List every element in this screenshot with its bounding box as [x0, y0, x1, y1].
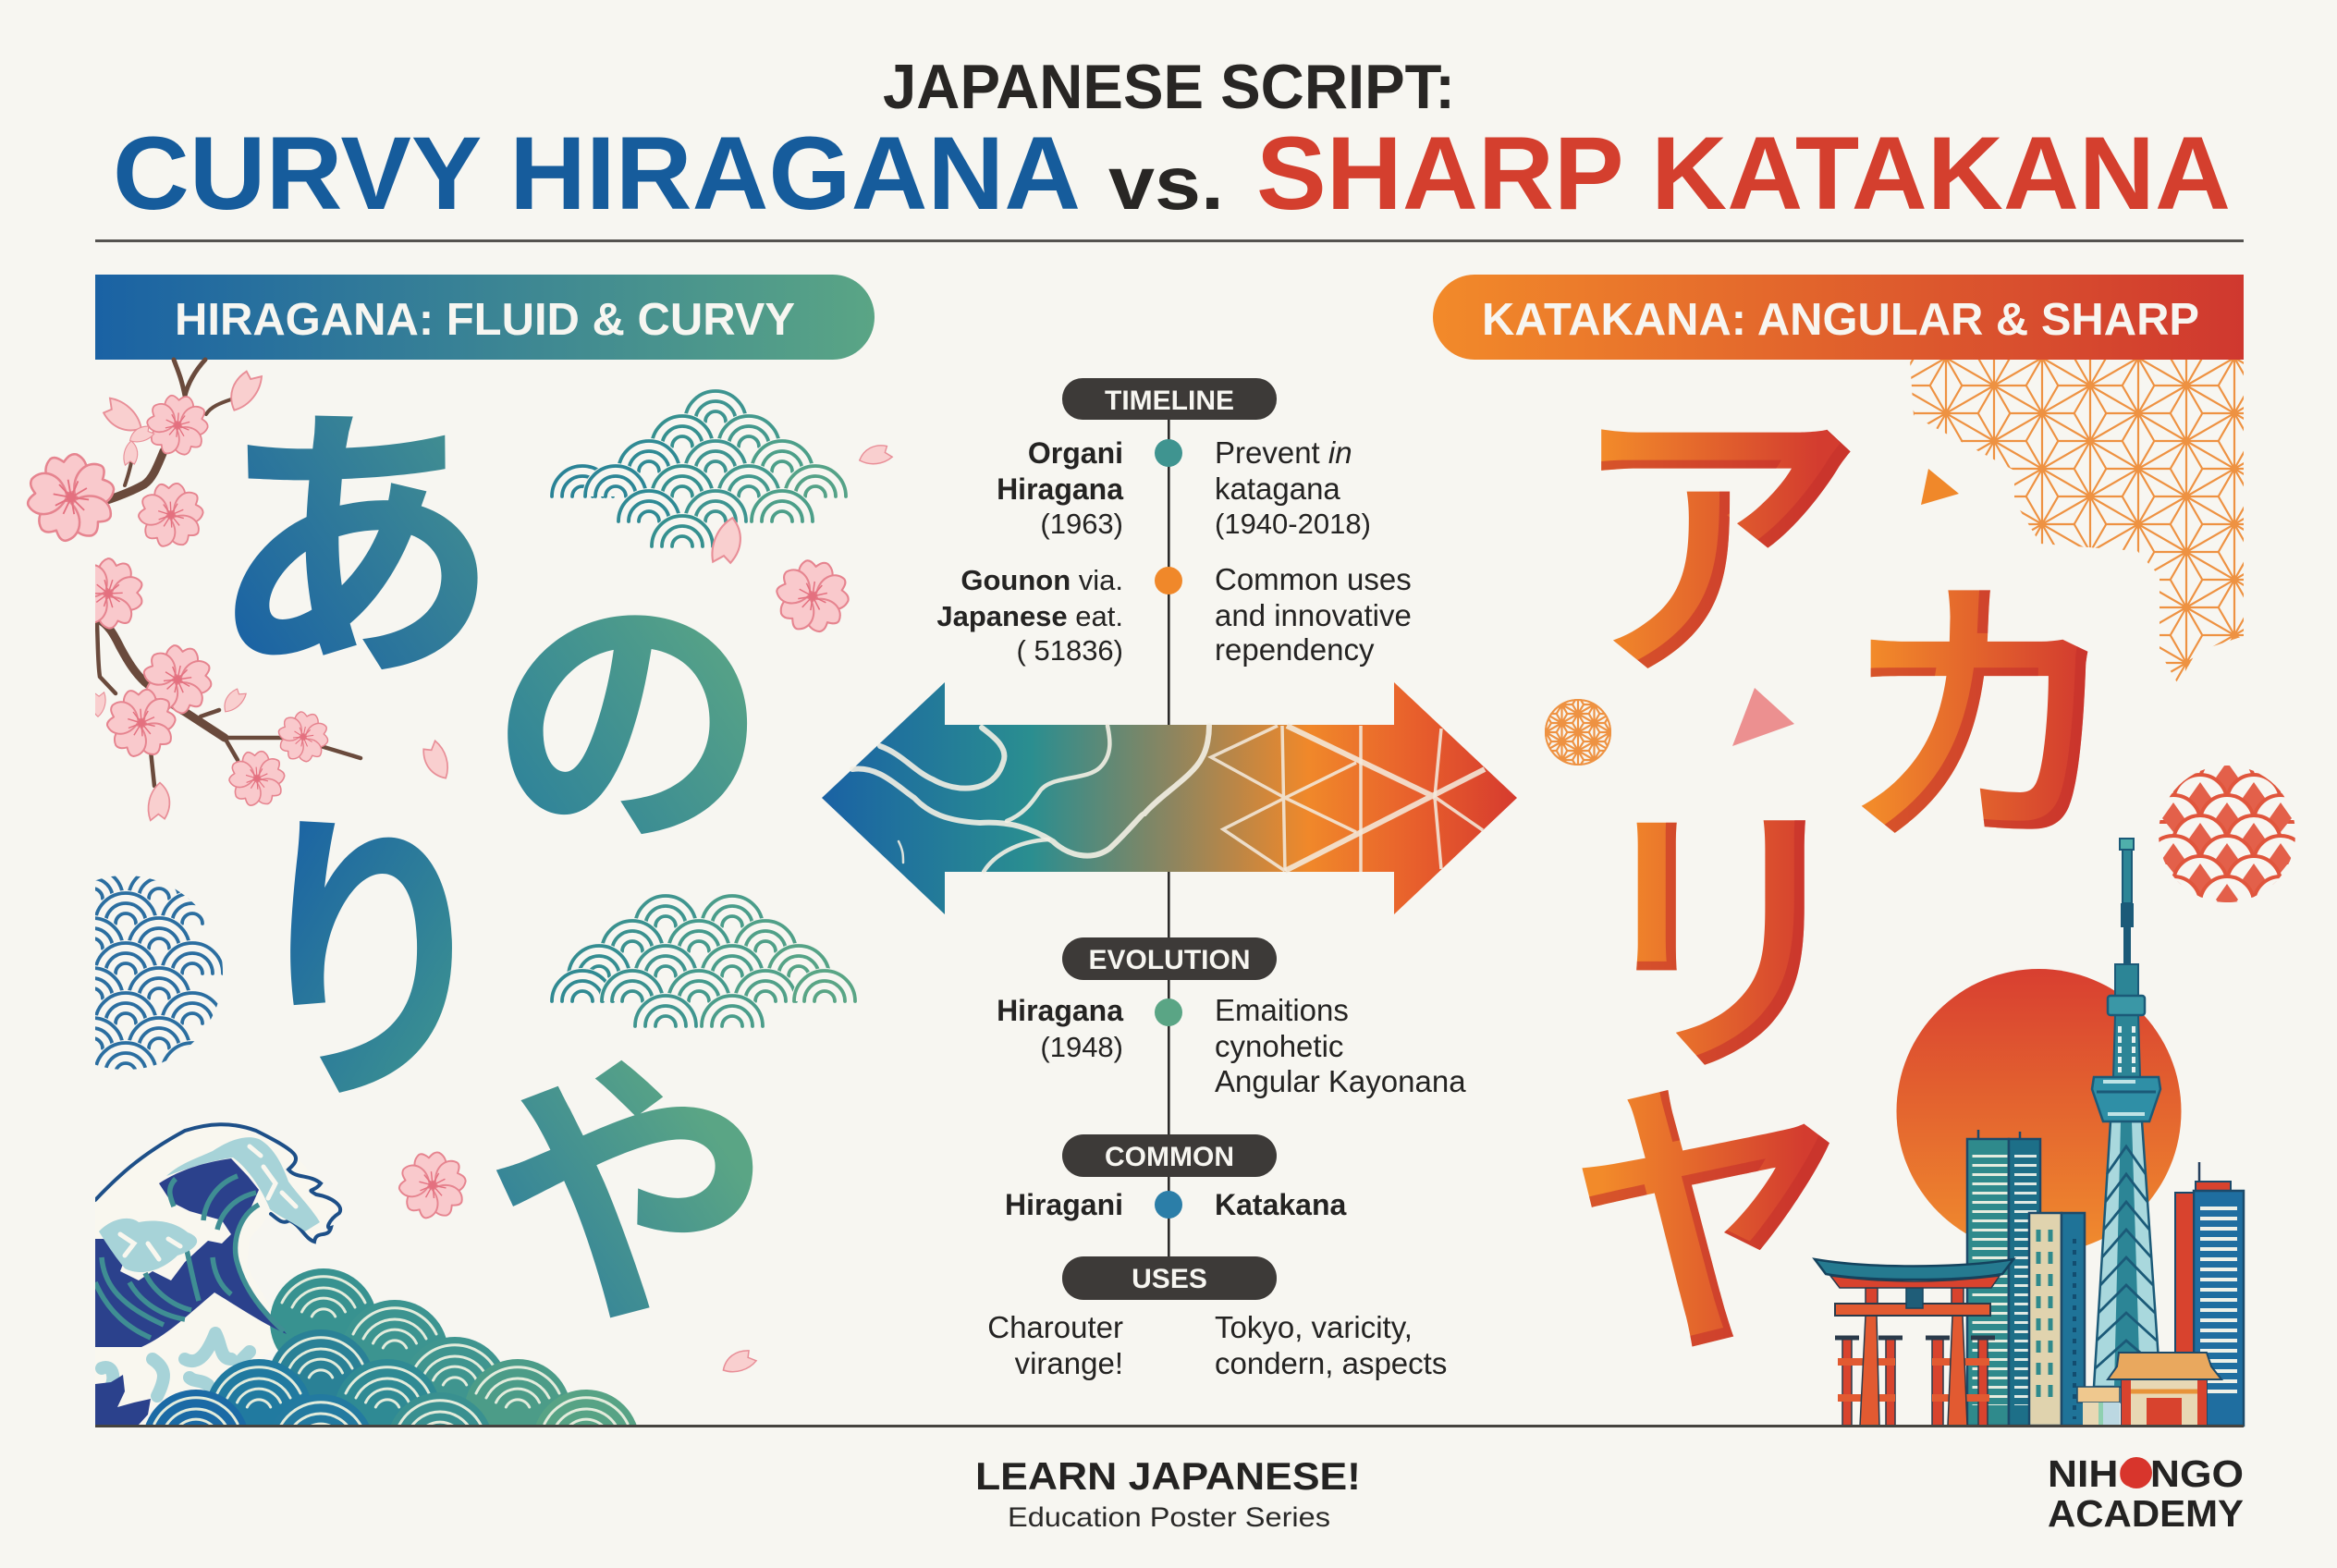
- banner: hiragana: [95, 275, 875, 360]
- cherry blossom branch: upper: [18, 360, 263, 551]
- wave pattern cluster: upper: [549, 388, 849, 546]
- illustration: rising sun: [1897, 969, 2182, 1254]
- entry: tokyo: condern, aspects: [1215, 1346, 1447, 1380]
- entry: hiragana year: (1948): [1040, 1031, 1123, 1063]
- entry: charouter: [987, 1310, 1123, 1380]
- illustration: tokyo skyline: [1815, 839, 2244, 1426]
- title: vs.: vs.: [1108, 141, 1224, 226]
- icon: orange patterned circle: [1545, 699, 1611, 766]
- building: teal tower: [1967, 1130, 2040, 1426]
- footer: call to action: [975, 1454, 1361, 1533]
- footer rule: [95, 1425, 2244, 1427]
- entry: emaitions: Angular Kayonana: [1215, 1064, 1466, 1098]
- timeline pill: timeline: TIMELINE: [1105, 386, 1234, 416]
- timeline pill: evolution: [1062, 937, 1277, 980]
- entry: tokyo: [1215, 1310, 1447, 1380]
- icon: floating blossom beside や: [394, 1149, 471, 1224]
- entry: common uses: and innovative: [1215, 598, 1412, 632]
- entry: prevent in katagana: katagana: [1215, 472, 1340, 506]
- timeline pill: uses: USES: [1132, 1264, 1207, 1294]
- entry: gounon via: Japanese eat.: [936, 600, 1123, 632]
- timeline pill: timeline: [1062, 378, 1277, 420]
- cherry blossom branch: lower: [95, 557, 362, 822]
- timeline node: blue: [1155, 1191, 1182, 1219]
- title: [113, 52, 2231, 231]
- title: Curvy Hiragana: CURVY HIRAGANA: [113, 116, 1081, 231]
- kana: や: や: [485, 967, 772, 1382]
- banner: katakana: [1433, 275, 2244, 360]
- timeline pill: common: COMMON: [1105, 1142, 1234, 1172]
- wave: lower foam: [102, 1333, 250, 1396]
- entry: prevent in katagana: Prevent in: [1215, 435, 1352, 470]
- timeline pill: evolution: EVOLUTION: [1088, 945, 1251, 975]
- logo: Nihongo Academy: NIHONGO: [2048, 1452, 2244, 1495]
- icon: petal mid: [419, 740, 456, 783]
- entry: emaitions: [1215, 993, 1466, 1098]
- wave: foam highlights: [120, 1234, 180, 1259]
- entry: emaitions: cynohetic: [1215, 1029, 1343, 1063]
- wave: foam body: [95, 1124, 339, 1425]
- entry: prevent in katagana: [1215, 435, 1371, 540]
- timeline pill: common: [1062, 1134, 1277, 1177]
- entry: common uses: Common uses: [1215, 562, 1412, 596]
- entry: charouter: Charouter: [987, 1310, 1123, 1344]
- entry: origin hiragana: [997, 436, 1123, 540]
- timeline pill: uses: [1062, 1256, 1277, 1300]
- banner: hiragana: HIRAGANA: FLUID & CURVY: [175, 295, 795, 345]
- entry: hiragana year: [997, 994, 1123, 1063]
- icon: pink triangle: [1732, 688, 1794, 746]
- entry: origin hiragana: Organi: [1028, 436, 1123, 470]
- entry: hiragana year: Hiragana: [997, 994, 1123, 1027]
- panel: hiragana side: [18, 275, 893, 1501]
- wave pattern circle: [95, 876, 223, 1070]
- landmark: sky tower: [2092, 839, 2160, 1387]
- banner: katakana: KATAKANA: ANGULAR & SHARP: [1482, 295, 2199, 345]
- timeline node: teal: [1155, 439, 1182, 467]
- icon: petal top: [857, 442, 893, 470]
- kana: ア: ア: [1568, 310, 1864, 738]
- icon: red scale circle: [2147, 754, 2307, 913]
- footer: call to action: LEARN JAPANESE!: [975, 1454, 1361, 1498]
- title: Sharp Katakana: SHARP KATAKANA: [1256, 116, 2231, 231]
- timeline node: orange: [1155, 567, 1182, 594]
- entry: hiragani: Hiragani: [1005, 1188, 1123, 1221]
- landmark: shrine gate building: [2077, 1353, 2221, 1426]
- icon: petal bottom: [719, 1346, 757, 1379]
- entry: prevent in katagana: (1940-2018): [1215, 508, 1371, 540]
- geometric pattern: asanoha corner: [1904, 360, 2244, 684]
- panel: central timeline: [822, 378, 1517, 1380]
- entry: emaitions: Emaitions: [1215, 993, 1349, 1027]
- entry: tokyo: Tokyo, varicity,: [1215, 1310, 1413, 1344]
- wave: navy base: [95, 1375, 151, 1425]
- logo: Nihongo Academy: [2048, 1452, 2244, 1535]
- timeline spine: [1168, 398, 1170, 1276]
- entry: origin hiragana: (1963): [1040, 508, 1123, 540]
- icon: floating blossom right of あ: [769, 557, 855, 640]
- kana: ヤ: ヤ: [1569, 989, 1846, 1412]
- wave: navy body: [95, 1158, 287, 1347]
- kana: り: り: [242, 712, 499, 1162]
- kana: の: の: [490, 500, 767, 901]
- wave scales behind crest: [270, 1268, 448, 1407]
- wave: teal stripes: [95, 1176, 284, 1338]
- building: blue tower: [2175, 1162, 2244, 1426]
- entry: common uses: rependency: [1215, 632, 1375, 667]
- panel: katakana side: [1433, 275, 2307, 1426]
- kana: カ: カ: [1838, 488, 2124, 903]
- entry: gounon via: ( 51836): [1017, 634, 1123, 667]
- footer: call to action: Education Poster Series: [1008, 1502, 1330, 1533]
- wave: foam patch: [99, 1219, 197, 1272]
- double arrow: [822, 682, 1517, 914]
- icon: petal over pattern: [710, 516, 744, 566]
- building: beige tower: [2029, 1213, 2085, 1426]
- logo: Nihongo Academy: ACADEMY: [2048, 1492, 2244, 1535]
- wave: crest outline: [95, 1124, 340, 1242]
- wave: foam specks: [250, 1146, 296, 1207]
- entry: charouter: virange!: [1015, 1346, 1123, 1380]
- entry: origin hiragana: Hiragana: [997, 472, 1123, 506]
- wave: light foam upper: [166, 1137, 320, 1231]
- wave scales at base: [142, 1329, 640, 1501]
- entry: katakana: Katakana: [1215, 1188, 1346, 1221]
- entry: gounon via: [936, 564, 1123, 667]
- illustration: great wave: [95, 1122, 636, 1425]
- wave pattern cluster: lower: [549, 893, 858, 1026]
- timeline node: green: [1155, 998, 1182, 1026]
- kana: あ: あ: [209, 313, 499, 735]
- landmark: torii gate: [1815, 1259, 2013, 1426]
- entry: common uses: [1215, 562, 1412, 667]
- kana: リ: リ: [1583, 708, 1860, 1134]
- title line: Japanese Script: JAPANESE SCRIPT:: [883, 52, 1455, 122]
- icon: orange triangle: [1921, 469, 1959, 505]
- entry: gounon via: Gounon via.: [960, 564, 1123, 596]
